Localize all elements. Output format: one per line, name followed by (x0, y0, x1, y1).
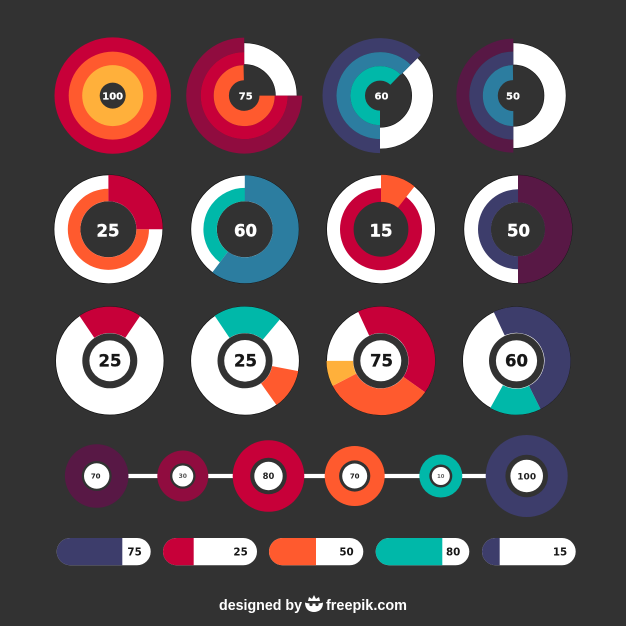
timeline connector line (128, 473, 486, 479)
chart: wheel 25 two segments (188, 304, 302, 418)
value: 15: 15 (370, 222, 392, 240)
timeline node: 80 crimson (233, 440, 304, 512)
value: 25: 25 (234, 352, 257, 370)
timeline node: 10 teal (419, 454, 462, 498)
chart: wheel 60 two segments (462, 306, 571, 416)
pill: 50: 50 (339, 546, 354, 558)
timeline node: 70 purple: 70 (91, 473, 101, 481)
timeline node: 70 orange: 70 (350, 473, 360, 481)
chart: concentric 100 (54, 37, 171, 154)
timeline node: 30 dark crimson (157, 450, 208, 502)
chart: wheel 25 (53, 304, 167, 418)
freepik wordmark: freepik.com (326, 598, 407, 614)
value: 75: 75 (370, 352, 393, 370)
value: 60: 60 (234, 222, 257, 240)
pill: 15 (482, 538, 576, 565)
timeline node: 70 orange (325, 446, 385, 506)
value: 100: 100 (102, 91, 123, 102)
footer credit (219, 595, 407, 614)
pill: 15: 15 (553, 546, 567, 558)
value: 25: 25 (99, 352, 121, 370)
chart: radial 75 (193, 45, 295, 146)
value: 25: 25 (97, 222, 119, 240)
pill: 80: 80 (446, 546, 460, 558)
footer credit: designed by (219, 598, 302, 614)
pill: 75: 75 (127, 546, 142, 558)
chart: donut 50 (464, 175, 572, 284)
value: 50: 50 (506, 91, 520, 102)
pill: 80 (376, 538, 469, 565)
value: 75: 75 (239, 91, 253, 102)
chart: radial 50 (463, 45, 564, 146)
chart: donut 25 (54, 175, 163, 284)
pill: 75 (57, 538, 151, 565)
chart: radial 60 (320, 35, 440, 156)
pill: 25 (163, 538, 257, 565)
chart: wheel 75 three segments (324, 304, 438, 418)
timeline node: 70 purple (65, 444, 128, 508)
timeline node: 30 dark crimson: 30 (179, 473, 187, 480)
value: 50: 50 (507, 222, 530, 240)
value: 60: 60 (375, 91, 388, 102)
pill: 25: 25 (233, 546, 248, 558)
chart: donut 60 (191, 175, 299, 283)
timeline node: 100 navy (486, 435, 568, 517)
timeline node: 80 crimson: 80 (263, 471, 274, 481)
pill: 50 (269, 538, 363, 565)
icon: freepik mascot (305, 595, 323, 612)
chart: donut 15 (327, 175, 435, 284)
value: 60: 60 (505, 352, 528, 370)
timeline node: 100 navy: 100 (517, 472, 536, 482)
timeline node: 10 teal: 10 (437, 474, 445, 480)
